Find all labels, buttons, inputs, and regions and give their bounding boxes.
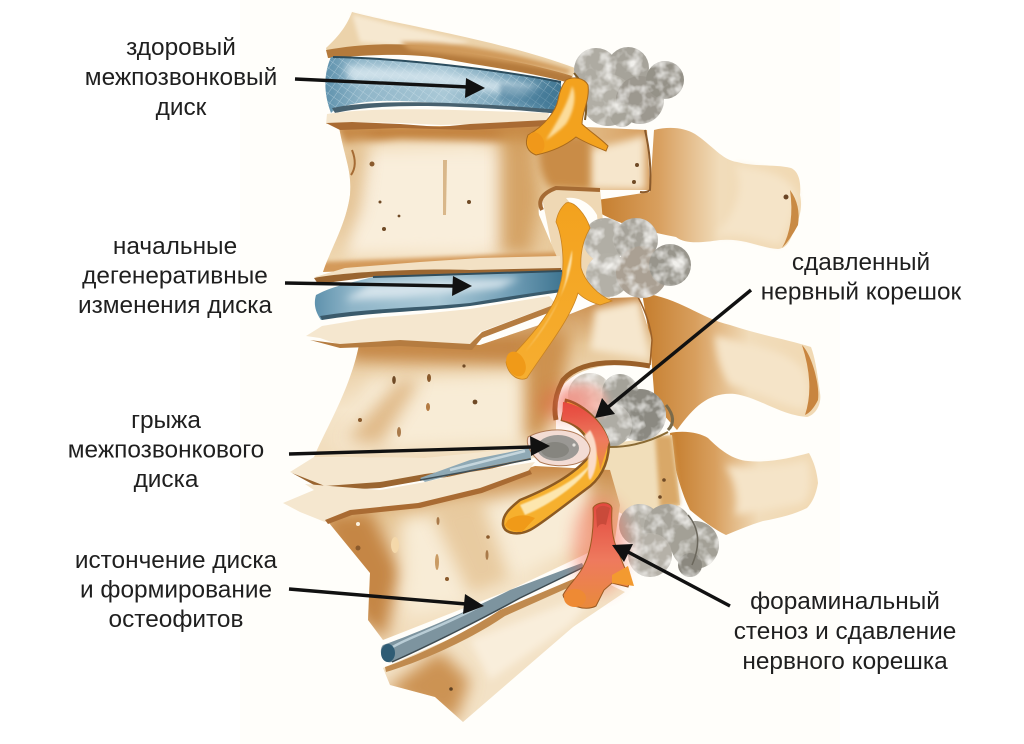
foramen backing: upper [540, 188, 610, 300]
nerve root: upper [525, 78, 608, 156]
arrow: healthy disc [295, 78, 485, 98]
label: thinned disc and osteophytes: остеофитов [109, 606, 243, 633]
herniated disc bulge [527, 430, 590, 466]
arrow: early degenerative changes [285, 276, 472, 296]
disc: herniated, collapsed disc [420, 448, 531, 482]
label: foraminal stenosis: нервного корешка [742, 648, 948, 675]
arrow: compressed nerve root [595, 290, 751, 418]
facet joint: middle [583, 218, 691, 298]
facet joint: lower [619, 504, 719, 577]
label: compressed nerve root: сдавленный [792, 249, 930, 276]
vertebra: bottom fragment [383, 572, 625, 722]
illustration: lumbar spine [283, 12, 820, 722]
label: herniated disc: диска [134, 466, 199, 493]
label: healthy disc: диск [156, 94, 207, 121]
facet joint: inflamed [560, 373, 673, 447]
label: healthy disc: межпозвонковый [85, 64, 277, 91]
foramen: white gap [566, 198, 598, 232]
arrow: thinned disc [289, 589, 484, 614]
vertebra: middle body [314, 297, 652, 458]
arrow: foraminal stenosis [612, 544, 730, 606]
label: early degenerative changes: дегенеративные [82, 262, 268, 290]
vertebra: lower rim of middle body [290, 448, 540, 491]
label: compressed nerve root: нервный корешок [761, 278, 962, 306]
facet joint: upper [574, 47, 684, 127]
spinous process: middle [642, 293, 820, 430]
vertebra: upper rim of lower body [283, 462, 535, 524]
nerve root: middle [502, 203, 612, 380]
label: herniated disc: грыжа [131, 407, 201, 434]
vertebra: upper rim of middle body [306, 296, 556, 350]
vertebra: upper rim below healthy disc [326, 109, 549, 130]
label: foraminal stenosis: стеноз и сдавление [734, 618, 956, 645]
label: healthy disc: здоровый [126, 34, 236, 61]
vertebra: lower rim of upper body [314, 256, 562, 284]
label: early degenerative changes: начальные [113, 233, 237, 260]
disc: healthy intervertebral disc [325, 55, 565, 117]
label: early degenerative changes: изменения диска [78, 292, 272, 319]
label: herniated disc: межпозвонкового [68, 436, 264, 464]
vertebra: lower pedicle block [580, 435, 680, 515]
background [240, 0, 840, 744]
vertebra: body with pedicle, upper [320, 122, 650, 280]
disc: thinned disc with osteophytes [381, 563, 584, 662]
spinous process: lower [670, 432, 818, 535]
vertebra: lower body [320, 466, 620, 640]
disc: early degenerative changes [315, 271, 562, 320]
label: thinned disc and osteophytes: и формирование [80, 576, 272, 604]
nerve root: compressed, with herniated disc [503, 386, 609, 533]
spinous process: upper [597, 128, 801, 249]
nerve root: foraminal stenosis [563, 497, 634, 608]
label: thinned disc and osteophytes: истончение диска [75, 547, 277, 574]
arrow: herniated disc [289, 436, 550, 456]
vertebra: top wedge [326, 12, 575, 83]
label: foraminal stenosis: фораминальный [750, 588, 940, 615]
